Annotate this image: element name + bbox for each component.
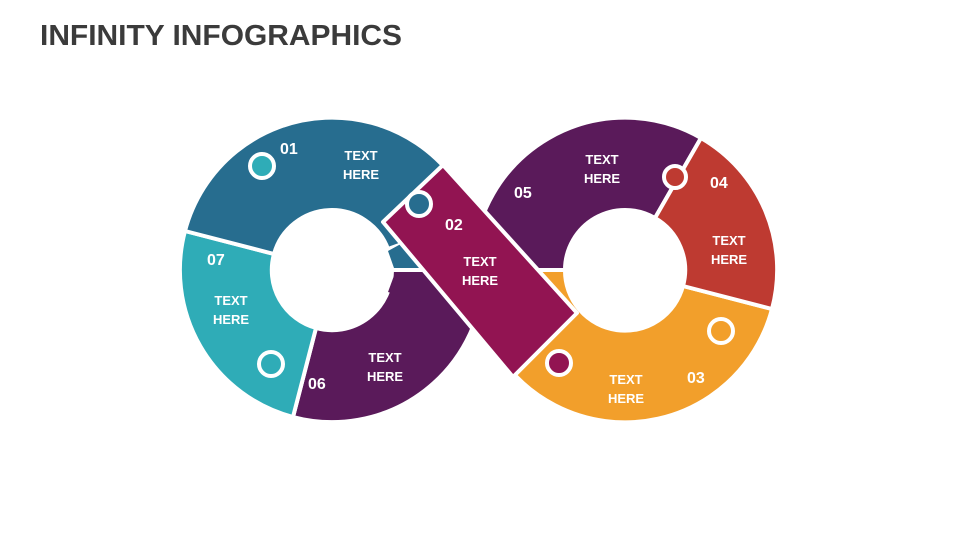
- label 01: HERE: [343, 167, 379, 182]
- label 07: HERE: [213, 312, 249, 327]
- tab 07 into 01: [250, 154, 274, 178]
- label 07: [207, 252, 249, 327]
- segment 03: [473, 270, 772, 422]
- label 06: TEXT: [368, 350, 402, 365]
- label 04: 04: [710, 175, 728, 192]
- label 03: [608, 370, 705, 406]
- infinity diagram: [180, 118, 777, 422]
- segment 07: [180, 231, 316, 417]
- label 03: 03: [687, 370, 705, 387]
- segment 02 band: [383, 165, 577, 377]
- tab 04 into 05: [664, 166, 686, 188]
- tab 03 into 04: [709, 319, 733, 343]
- label 02: 02: [445, 217, 463, 234]
- label 07: TEXT: [214, 293, 248, 308]
- label 05: 05: [514, 185, 532, 202]
- label 02: HERE: [462, 273, 498, 288]
- filler near crossing: [388, 228, 450, 310]
- tab 02 into 03: [547, 351, 571, 375]
- tab 07 into 06: [259, 352, 283, 376]
- label 01: [280, 141, 379, 182]
- label 04: [710, 175, 747, 267]
- label 04: HERE: [711, 252, 747, 267]
- label 07: 07: [207, 252, 225, 269]
- tab 01 into 02: [407, 192, 431, 216]
- label 06: [308, 350, 403, 393]
- label 01: TEXT: [344, 148, 378, 163]
- segment 01: [185, 118, 475, 254]
- label 06: 06: [308, 376, 326, 393]
- segment 05: [473, 118, 701, 270]
- segment 06: [293, 270, 484, 422]
- label 03: HERE: [608, 391, 644, 406]
- label 02: [445, 217, 498, 288]
- label 05: [514, 152, 620, 202]
- label 01: 01: [280, 141, 298, 158]
- label 06: HERE: [367, 369, 403, 384]
- label 03: TEXT: [609, 372, 643, 387]
- label 05: HERE: [584, 171, 620, 186]
- label 05: TEXT: [585, 152, 619, 167]
- title: INFINITY INFOGRAPHICS: [40, 20, 402, 52]
- label 02: TEXT: [463, 254, 497, 269]
- segment 04: [655, 138, 777, 309]
- label 04: TEXT: [712, 233, 746, 248]
- labels: [207, 141, 747, 406]
